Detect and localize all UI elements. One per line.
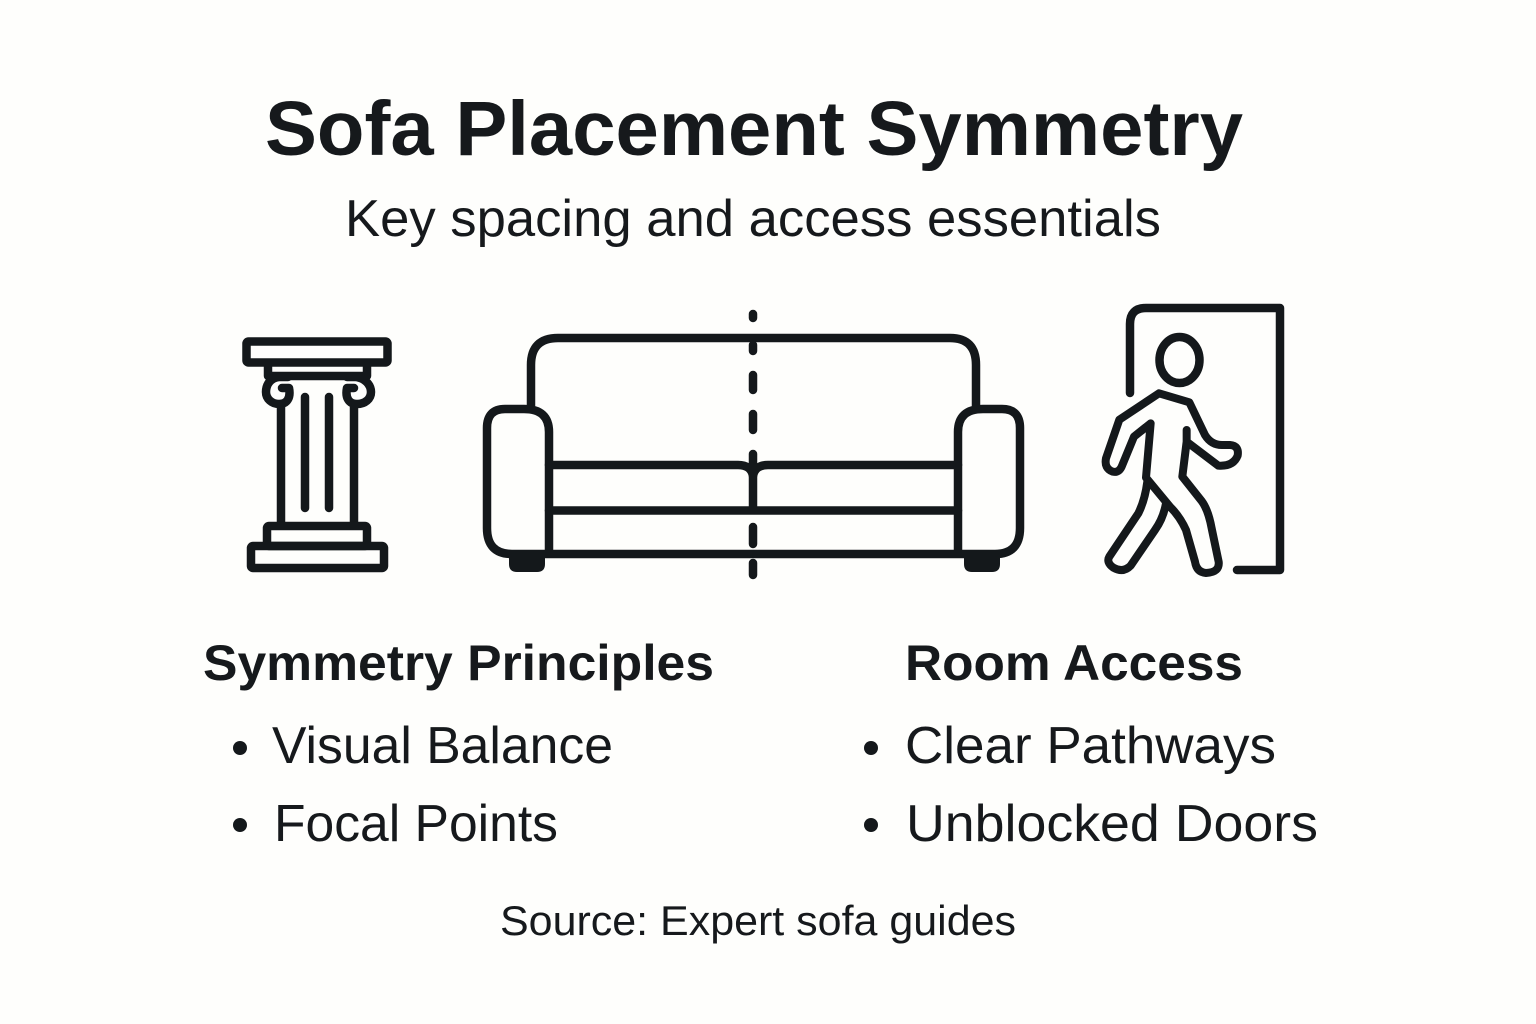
list: room access: Unblocked Doors [906,795,1318,853]
symmetry axis [749,314,757,575]
door frame [1130,308,1280,570]
heading: symmetry principles: Symmetry Principles [203,635,714,691]
head [1160,337,1200,383]
source note: Source: Expert sofa guides [500,897,1016,944]
sofa back [531,338,976,408]
list: room access: Clear Pathways [905,717,1276,775]
title: Sofa Placement Symmetry [265,86,1243,172]
sofa feet [509,556,1000,572]
body [1106,393,1238,573]
list: symmetry principles [233,717,613,853]
list: symmetry principles: Visual Balance [272,717,613,775]
sofa seat cushions [549,465,958,510]
list: room access [864,717,1318,853]
icon: sofa with symmetry axis [487,314,1020,575]
heading: room access: Room Access [905,635,1243,691]
subtitle: Key spacing and access essentials [345,190,1161,248]
list: symmetry principles: Focal Points [274,795,558,853]
icon: classical column [246,342,388,568]
sofa left arm [487,409,1020,554]
icon: person walking through door [1106,308,1280,573]
